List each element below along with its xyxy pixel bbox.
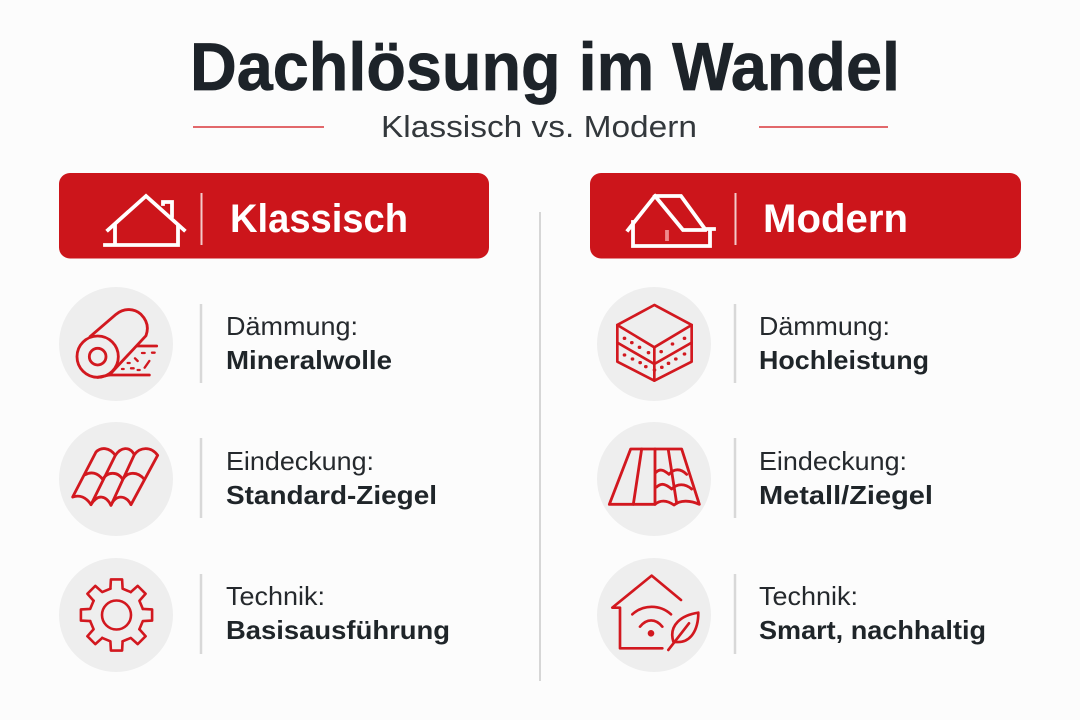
icon: insulation roll — [77, 310, 157, 377]
row: Eindeckung Metall/Ziegel: Metall/Ziegel — [759, 480, 933, 510]
row: Technik Smart, nachhaltig: Smart, nachhaltig — [759, 615, 986, 645]
header: Modern — [590, 173, 1021, 258]
row: Eindeckung Standard-Ziegel: Eindeckung: — [226, 446, 374, 476]
row: Dämmung Hochleistung: Dämmung: — [759, 311, 890, 341]
icon: metal and tile roof — [609, 449, 699, 505]
header: Modern: Modern — [763, 197, 908, 241]
row: Eindeckung Metall/Ziegel: Eindeckung: — [759, 446, 907, 476]
subtitle with side rules: Klassisch vs. Modern — [381, 109, 697, 144]
header: Klassisch — [59, 173, 489, 258]
row: Technik Smart, nachhaltig: Technik: — [759, 581, 858, 611]
panel: Modern column — [590, 173, 1021, 672]
icon: gear — [81, 579, 152, 651]
row: Technik Basisausführung: Technik: — [226, 581, 325, 611]
panel: Klassisch column — [59, 173, 489, 672]
icon: classic house — [105, 196, 184, 245]
header: Klassisch: Klassisch — [230, 197, 408, 241]
row: Technik Smart, nachhaltig — [597, 558, 986, 672]
row: Dämmung Mineralwolle: Mineralwolle — [226, 345, 392, 375]
row: Eindeckung Standard-Ziegel — [59, 422, 437, 536]
row: Dämmung Mineralwolle: Dämmung: — [226, 311, 358, 341]
title: Dachlösung im Wandel — [190, 29, 900, 105]
icon: insulation layers — [617, 305, 692, 381]
icon: smart home with leaf — [612, 576, 698, 650]
icon: roof tiles — [73, 449, 158, 505]
center divider — [539, 212, 541, 681]
row: Eindeckung Standard-Ziegel: Standard-Ziegel — [226, 480, 437, 510]
row: Dämmung Hochleistung: Hochleistung — [759, 345, 929, 375]
row: Eindeckung Metall/Ziegel — [597, 422, 933, 536]
row: Technik Basisausführung — [59, 558, 450, 672]
icon: modern house — [628, 196, 714, 246]
row: Dämmung Mineralwolle — [59, 287, 392, 401]
row: Technik Basisausführung: Basisausführung — [226, 615, 450, 645]
row: Dämmung Hochleistung — [597, 287, 929, 401]
